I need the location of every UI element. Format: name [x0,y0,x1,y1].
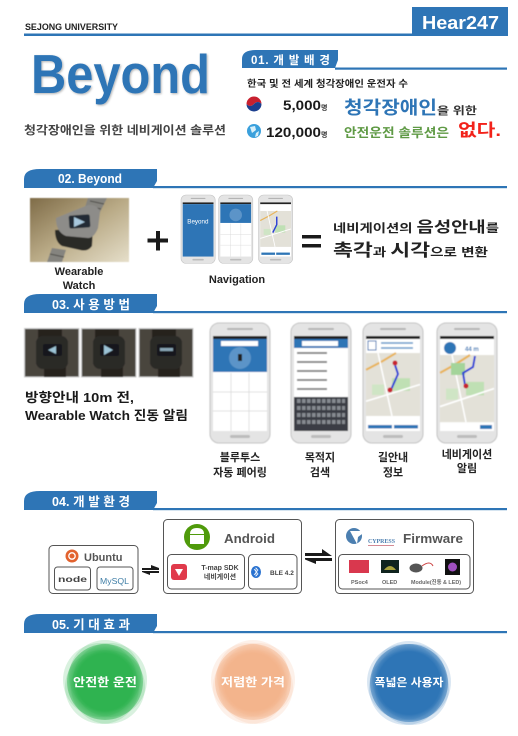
photo: right direction [82,328,136,377]
stat: Korea drivers: 명 [321,103,327,112]
statement: voice guidance conversion: 촉각 과 시각 으로 변환 [333,241,489,260]
box: MySQL: MySQL [100,577,130,586]
statement: for hearing impaired: 청각장애인 [344,98,437,118]
stat: world drivers: 120,000 [266,124,321,140]
photo: U-turn [139,328,193,377]
icon: plus [148,231,168,250]
arrows: Android to Firmware [305,549,332,564]
circle: safe driving: 안전한 운전 [73,675,137,689]
image: OLED: OLED [382,580,397,586]
subtitle: 청각장애인을 위한 네비게이션 솔루션 [24,123,226,137]
text: usage description: Wearable Watch 진동 알림 [25,408,188,423]
section 02 heading: 02. Beyond [58,172,122,186]
label: Wearable Watch [55,266,103,292]
box: T-map SDK [168,554,244,589]
section 03 heading: 03. 사 용 방 법 [52,298,130,312]
section 04 heading: 04. 개 발 환 경 [52,495,130,509]
badge: Hear247: Hear247 [422,13,499,33]
phone: bluetooth pairing [210,323,270,443]
label: route info [378,450,408,479]
box: firmware modules [338,554,470,589]
section 05 heading [24,614,507,633]
text: usage description [25,390,188,423]
panel: Ubuntu: Ubuntu [84,552,122,564]
logo: Cypress: CYPRESS [368,538,395,545]
stat: world drivers: 명 [321,130,327,139]
label: navigation alert [442,447,492,475]
circle: wide range of users [367,641,451,725]
panel: Android [164,520,302,594]
stats caption: 한국 및 전 세계 청각장애인 운전자 수 [247,78,408,90]
box: BLE 4.2: BLE 4.2 [270,570,294,577]
icon: equals [302,235,321,248]
box: T-map SDK: 네비게이션 [204,572,236,581]
statement: for hearing impaired [344,98,477,118]
icon: globe [247,124,261,138]
image: LED [445,559,460,575]
label: destination search: 검색 [310,466,330,479]
statement: voice guidance conversion: 네비게이션의 음성안내 를 [333,219,500,236]
image: PSoc4: PSoc4 [351,580,369,586]
photos: watch display steps [24,328,193,377]
label: route info: 길안내 [378,450,408,464]
label: Wearable Watch: Watch [63,280,96,292]
box: node.js: node [58,575,88,584]
screens: navigation app [181,195,293,263]
panel: Firmware [336,520,474,594]
photo: left direction [24,328,79,377]
text: usage description: 방향안내 10m 전, [25,390,134,405]
statement: no solution: 안전운전 솔루션은 [344,126,449,140]
section 02 heading [24,169,507,188]
circle: low price [211,640,295,724]
phone: navigation alert [437,323,497,443]
statement: no solution [344,121,501,140]
box: T-map SDK: T-map SDK [201,565,239,572]
circle: wide range of users: 폭넓은 사용자 [374,676,444,689]
stat: Korea drivers: 5,000 [283,97,321,113]
icon: Android [184,524,210,550]
icon: Ubuntu [66,550,78,562]
section 05 heading: 05. 기 대 효 과 [52,617,130,632]
statement: voice guidance conversion [333,219,500,260]
label: bluetooth pairing [213,451,267,479]
screen: home [219,195,253,263]
statement: no solution: 없다. [458,121,501,140]
image: vibration motor: Module(진동 & LED) [411,578,461,586]
label: destination search: 목적지 [305,451,335,464]
section 01 heading [242,50,507,70]
header: university name and line: SEJONG UNIVERSITY [25,22,119,33]
label: bluetooth pairing: 자동 페어링 [213,465,267,479]
label: destination search [305,451,335,479]
label: route info: 정보 [383,466,403,479]
phone: route info [363,323,423,443]
title: Beyond: Beyond [31,43,210,105]
screen: splash: Beyond [187,218,209,225]
badge: Hear247 [412,7,508,36]
panel: Android: Android [224,531,275,546]
label: navigation alert: 알림 [457,461,477,475]
label: bluetooth pairing: 블루투스 [220,451,260,464]
label: Wearable Watch: Wearable [55,266,103,278]
phone: destination search [291,323,351,443]
circle: low price: 저렴한 가격 [221,675,285,689]
photo: wearable watch [30,198,129,262]
section 01: background [242,50,507,140]
section 04 heading [24,491,507,510]
label: Navigation: Navigation [209,274,265,286]
label: navigation alert: 네비게이션 [442,447,492,461]
panel: Firmware: Firmware [403,531,463,546]
panel: Ubuntu [49,546,138,594]
section 01 heading: 01. 개 발 배 경 [251,53,330,67]
circle: safe driving [63,640,147,724]
screen: route map [259,195,293,263]
statement: for hearing impaired: 을 위한 [437,104,477,117]
icon: Korean flag [246,96,262,112]
arrows: Ubuntu to Android [142,565,159,575]
phone: navigation alert: 44 m [465,347,479,353]
section 03 heading [24,294,507,313]
